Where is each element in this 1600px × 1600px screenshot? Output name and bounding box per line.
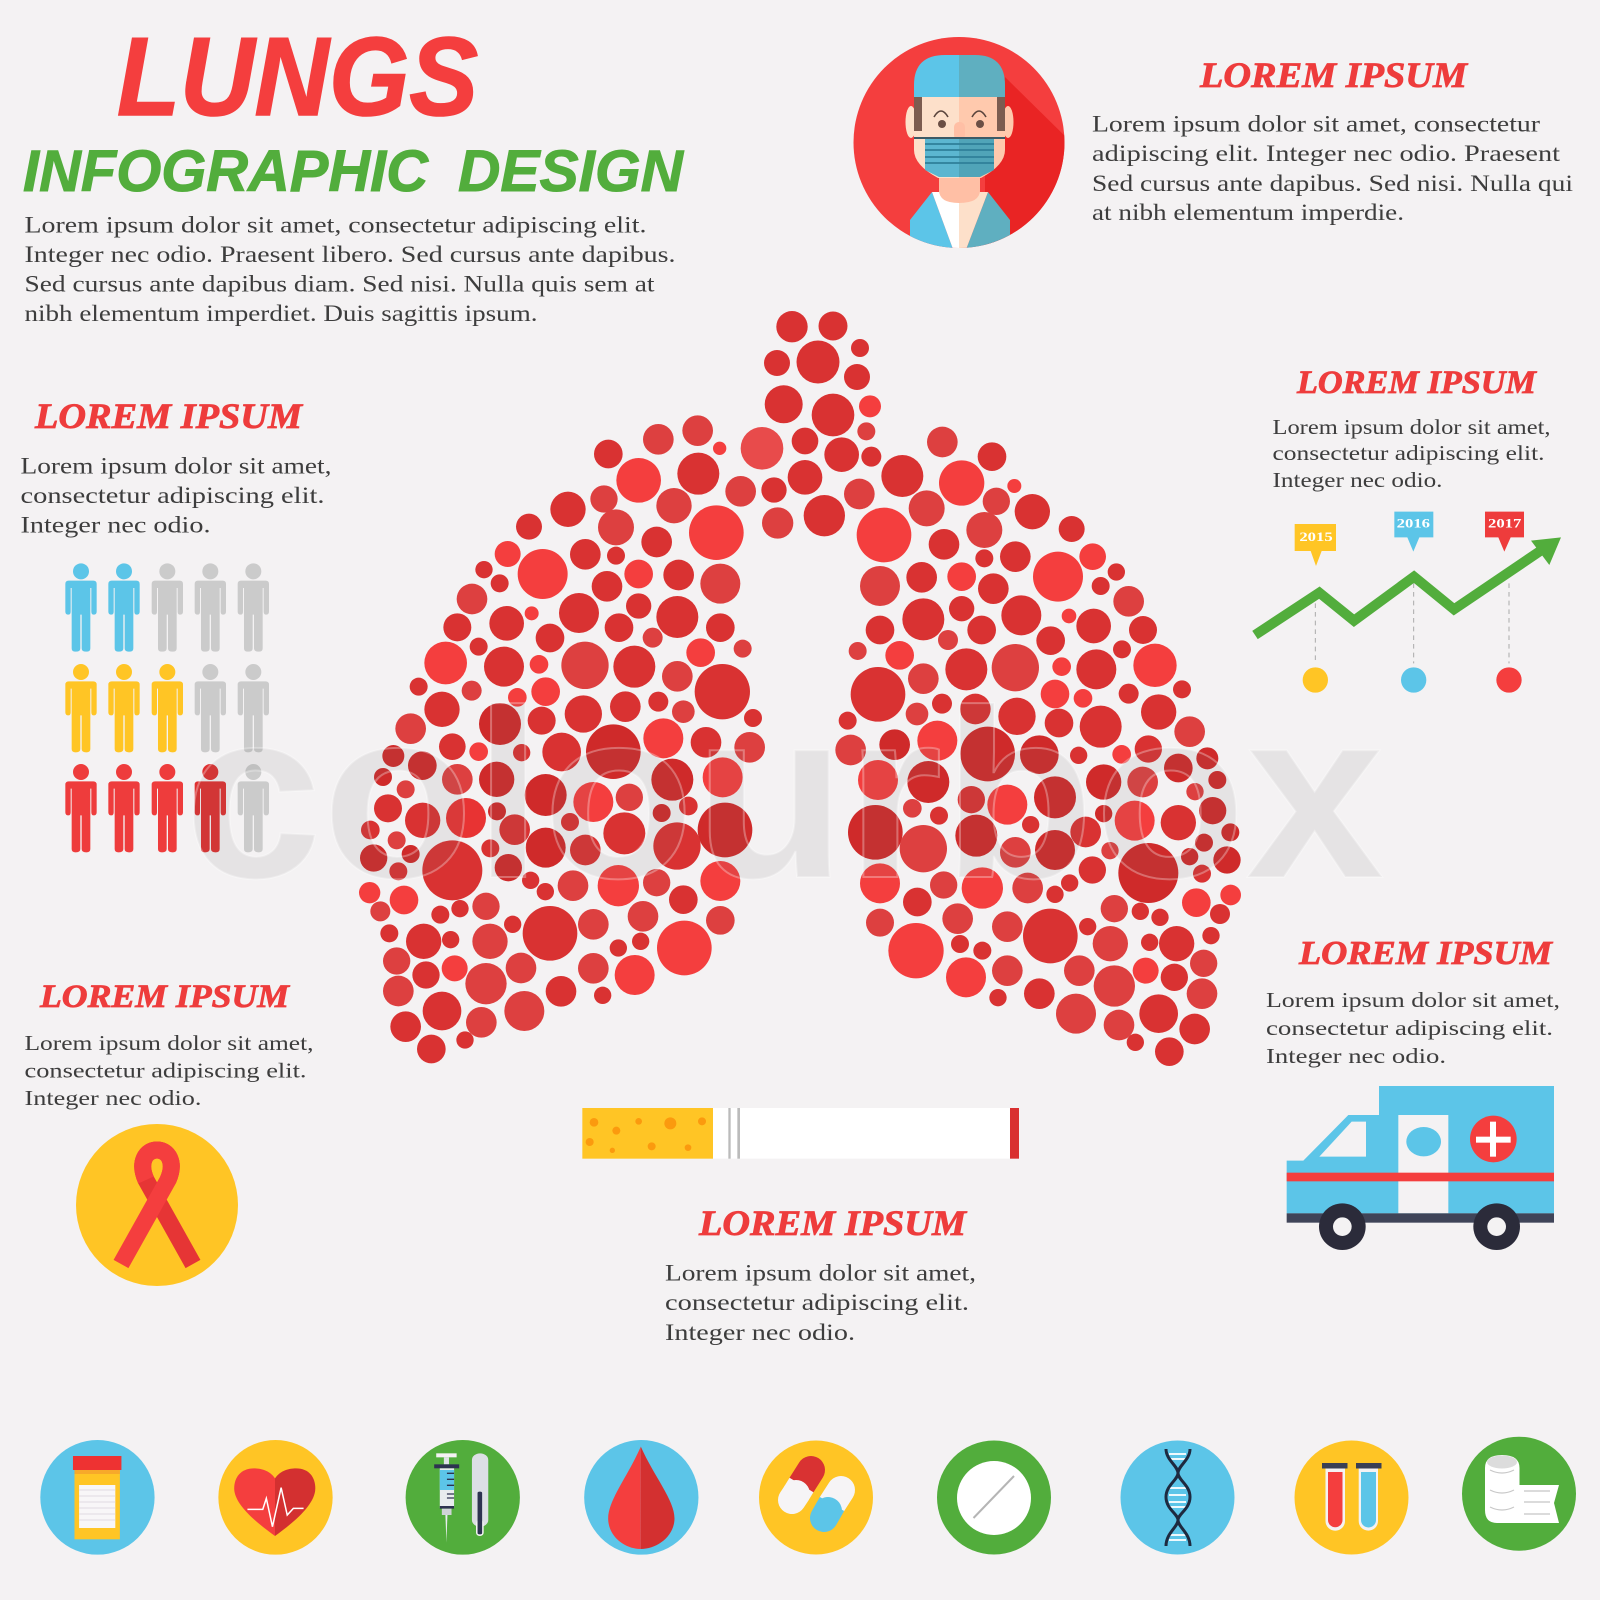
text block: top right: Sed cursus ante dapibus. Sed nisi. Nulla qui xyxy=(1092,171,1573,196)
subtitle: infographic design: INFOGRAPHIC xyxy=(23,139,429,204)
icon: heart with pulse xyxy=(218,1440,333,1555)
subtitle: infographic design xyxy=(23,139,684,204)
icon: doctor portrait xyxy=(854,37,1072,260)
intro text block: Lorem ipsum dolor sit amet, consectetur adipiscing elit. xyxy=(24,212,646,238)
icon: capsules xyxy=(759,1440,873,1554)
text block: right lower xyxy=(1266,988,1560,1068)
icon: syringe and thermometer xyxy=(406,1440,520,1555)
intro text block xyxy=(24,212,676,326)
icon: tablet xyxy=(937,1440,1051,1554)
watermark: colourbox xyxy=(184,660,1384,928)
trend line chart with year flags: 2016 xyxy=(1397,516,1430,530)
heading: right upper: LOREM IPSUM xyxy=(1296,365,1538,401)
text block: centre xyxy=(665,1261,976,1345)
heading: left lower: LOREM IPSUM xyxy=(39,979,291,1015)
subtitle: infographic design: DESIGN xyxy=(458,139,684,204)
icon: test tubes xyxy=(1294,1440,1408,1554)
heading: centre: LOREM IPSUM xyxy=(698,1203,968,1243)
intro text block: Sed cursus ante dapibus diam. Sed nisi. Nulla quis sem at xyxy=(24,272,655,296)
text block: right lower: consectetur adipiscing elit. xyxy=(1266,1016,1553,1040)
icon: ambulance xyxy=(1287,1086,1554,1250)
title: LUNGS: LUNGS xyxy=(117,15,478,139)
text block: left lower xyxy=(24,1031,314,1110)
icon: DNA helix xyxy=(1120,1440,1234,1554)
heading: right lower: LOREM IPSUM xyxy=(1298,935,1554,972)
icon: cigarette xyxy=(582,1108,1019,1159)
text block: centre: Integer nec odio. xyxy=(665,1320,855,1345)
trend line chart with year flags: 2017 xyxy=(1488,516,1522,530)
text block: right lower: Lorem ipsum dolor sit amet, xyxy=(1266,988,1560,1012)
text block: centre: Lorem ipsum dolor sit amet, xyxy=(665,1261,976,1286)
icon: blood drop xyxy=(584,1440,698,1555)
text block: top right: Lorem ipsum dolor sit amet, consectetur xyxy=(1092,112,1540,137)
text block: left lower: consectetur adipiscing elit. xyxy=(24,1059,306,1083)
text block: left upper xyxy=(20,454,332,538)
text block: top right: adipiscing elit. Integer nec odio. Praesent xyxy=(1092,141,1561,166)
text block: right upper: Lorem ipsum dolor sit amet, xyxy=(1272,415,1550,439)
text block: left lower: Lorem ipsum dolor sit amet, xyxy=(24,1031,314,1055)
icon: pill bottle xyxy=(40,1440,155,1555)
lungs made of red circles xyxy=(359,311,1241,1066)
text block: top right xyxy=(1092,112,1573,225)
heading: top right: LOREM IPSUM xyxy=(1199,55,1469,95)
text block: right upper xyxy=(1272,415,1550,492)
heading: left upper: LOREM IPSUM xyxy=(34,396,304,436)
icon: bandage roll xyxy=(1462,1437,1576,1551)
text block: left upper: consectetur adipiscing elit. xyxy=(20,483,324,508)
text block: top right: at nibh elementum imperdie. xyxy=(1092,200,1404,225)
intro text block: Integer nec odio. Praesent libero. Sed cursus ante dapibus. xyxy=(24,242,676,267)
text block: left upper: Integer nec odio. xyxy=(20,513,210,538)
pictogram chart: people rows xyxy=(65,563,269,852)
intro text block: nibh elementum imperdiet. Duis sagittis ipsum. xyxy=(24,301,538,326)
text block: right lower: Integer nec odio. xyxy=(1266,1044,1446,1068)
icon: awareness ribbon xyxy=(76,1124,238,1286)
text block: left lower: Integer nec odio. xyxy=(24,1086,202,1110)
text block: right upper: Integer nec odio. xyxy=(1272,468,1442,492)
trend line chart with year flags: 2015 xyxy=(1299,530,1333,544)
trend line chart with year flags xyxy=(1255,512,1561,693)
text block: centre: consectetur adipiscing elit. xyxy=(665,1290,969,1315)
text block: left upper: Lorem ipsum dolor sit amet, xyxy=(20,454,332,478)
text block: right upper: consectetur adipiscing elit. xyxy=(1272,441,1544,465)
